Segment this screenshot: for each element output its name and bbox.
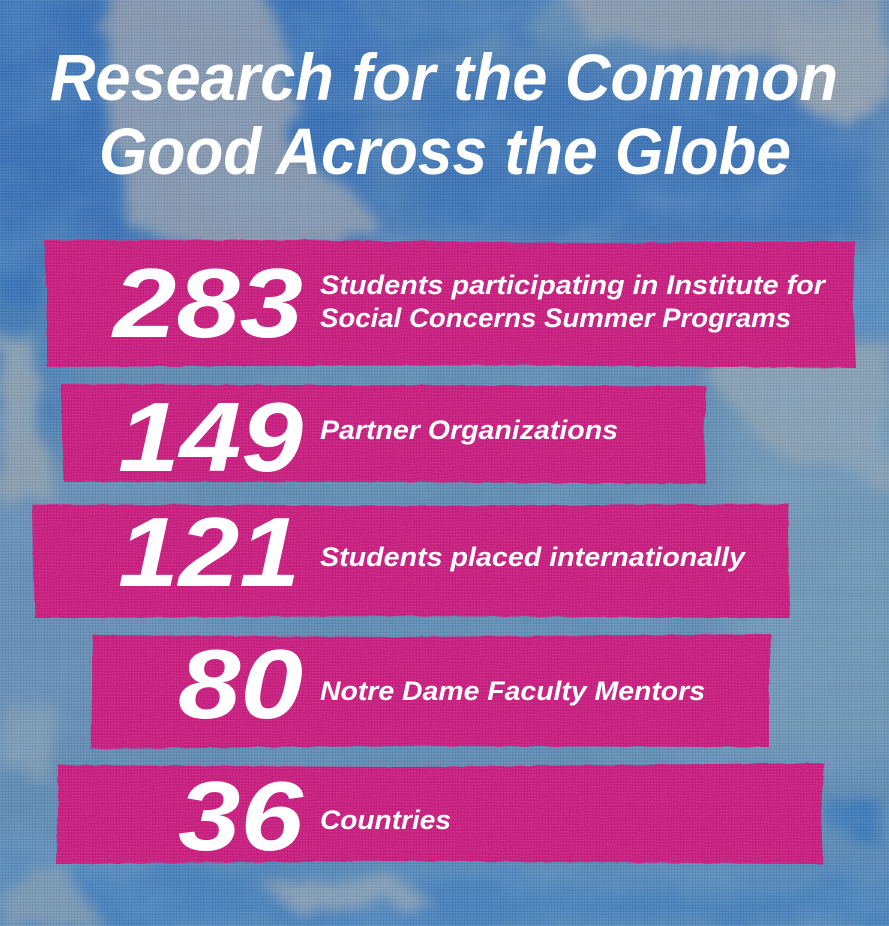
number: 121 [118, 497, 300, 607]
panel: stat 283 students [44, 240, 856, 368]
title: Good Across the Globe [99, 114, 791, 188]
panel: stat 80 mentors [91, 629, 771, 749]
bar [56, 763, 824, 864]
title [50, 40, 838, 188]
panel: stat 149 partners [61, 382, 706, 492]
label: Social Concerns Summer Programs [320, 303, 791, 333]
label: Countries [320, 805, 451, 835]
label: Notre Dame Faculty Mentors [320, 676, 705, 706]
label [320, 270, 827, 333]
bar [44, 240, 856, 368]
number: 36 [178, 761, 305, 871]
label: Students placed internationally [320, 542, 747, 572]
bar [32, 504, 790, 618]
label: Students participating in Institute for [320, 270, 827, 300]
title: Research for the Common [50, 40, 838, 114]
panel: stat 36 countries [56, 761, 824, 871]
number: 149 [118, 382, 304, 492]
bar [91, 634, 771, 749]
panel: stat 121 students abroad [32, 497, 790, 618]
label: Partner Organizations [320, 415, 618, 445]
number: 80 [178, 629, 303, 739]
bar [61, 384, 706, 484]
number: 283 [111, 248, 303, 358]
